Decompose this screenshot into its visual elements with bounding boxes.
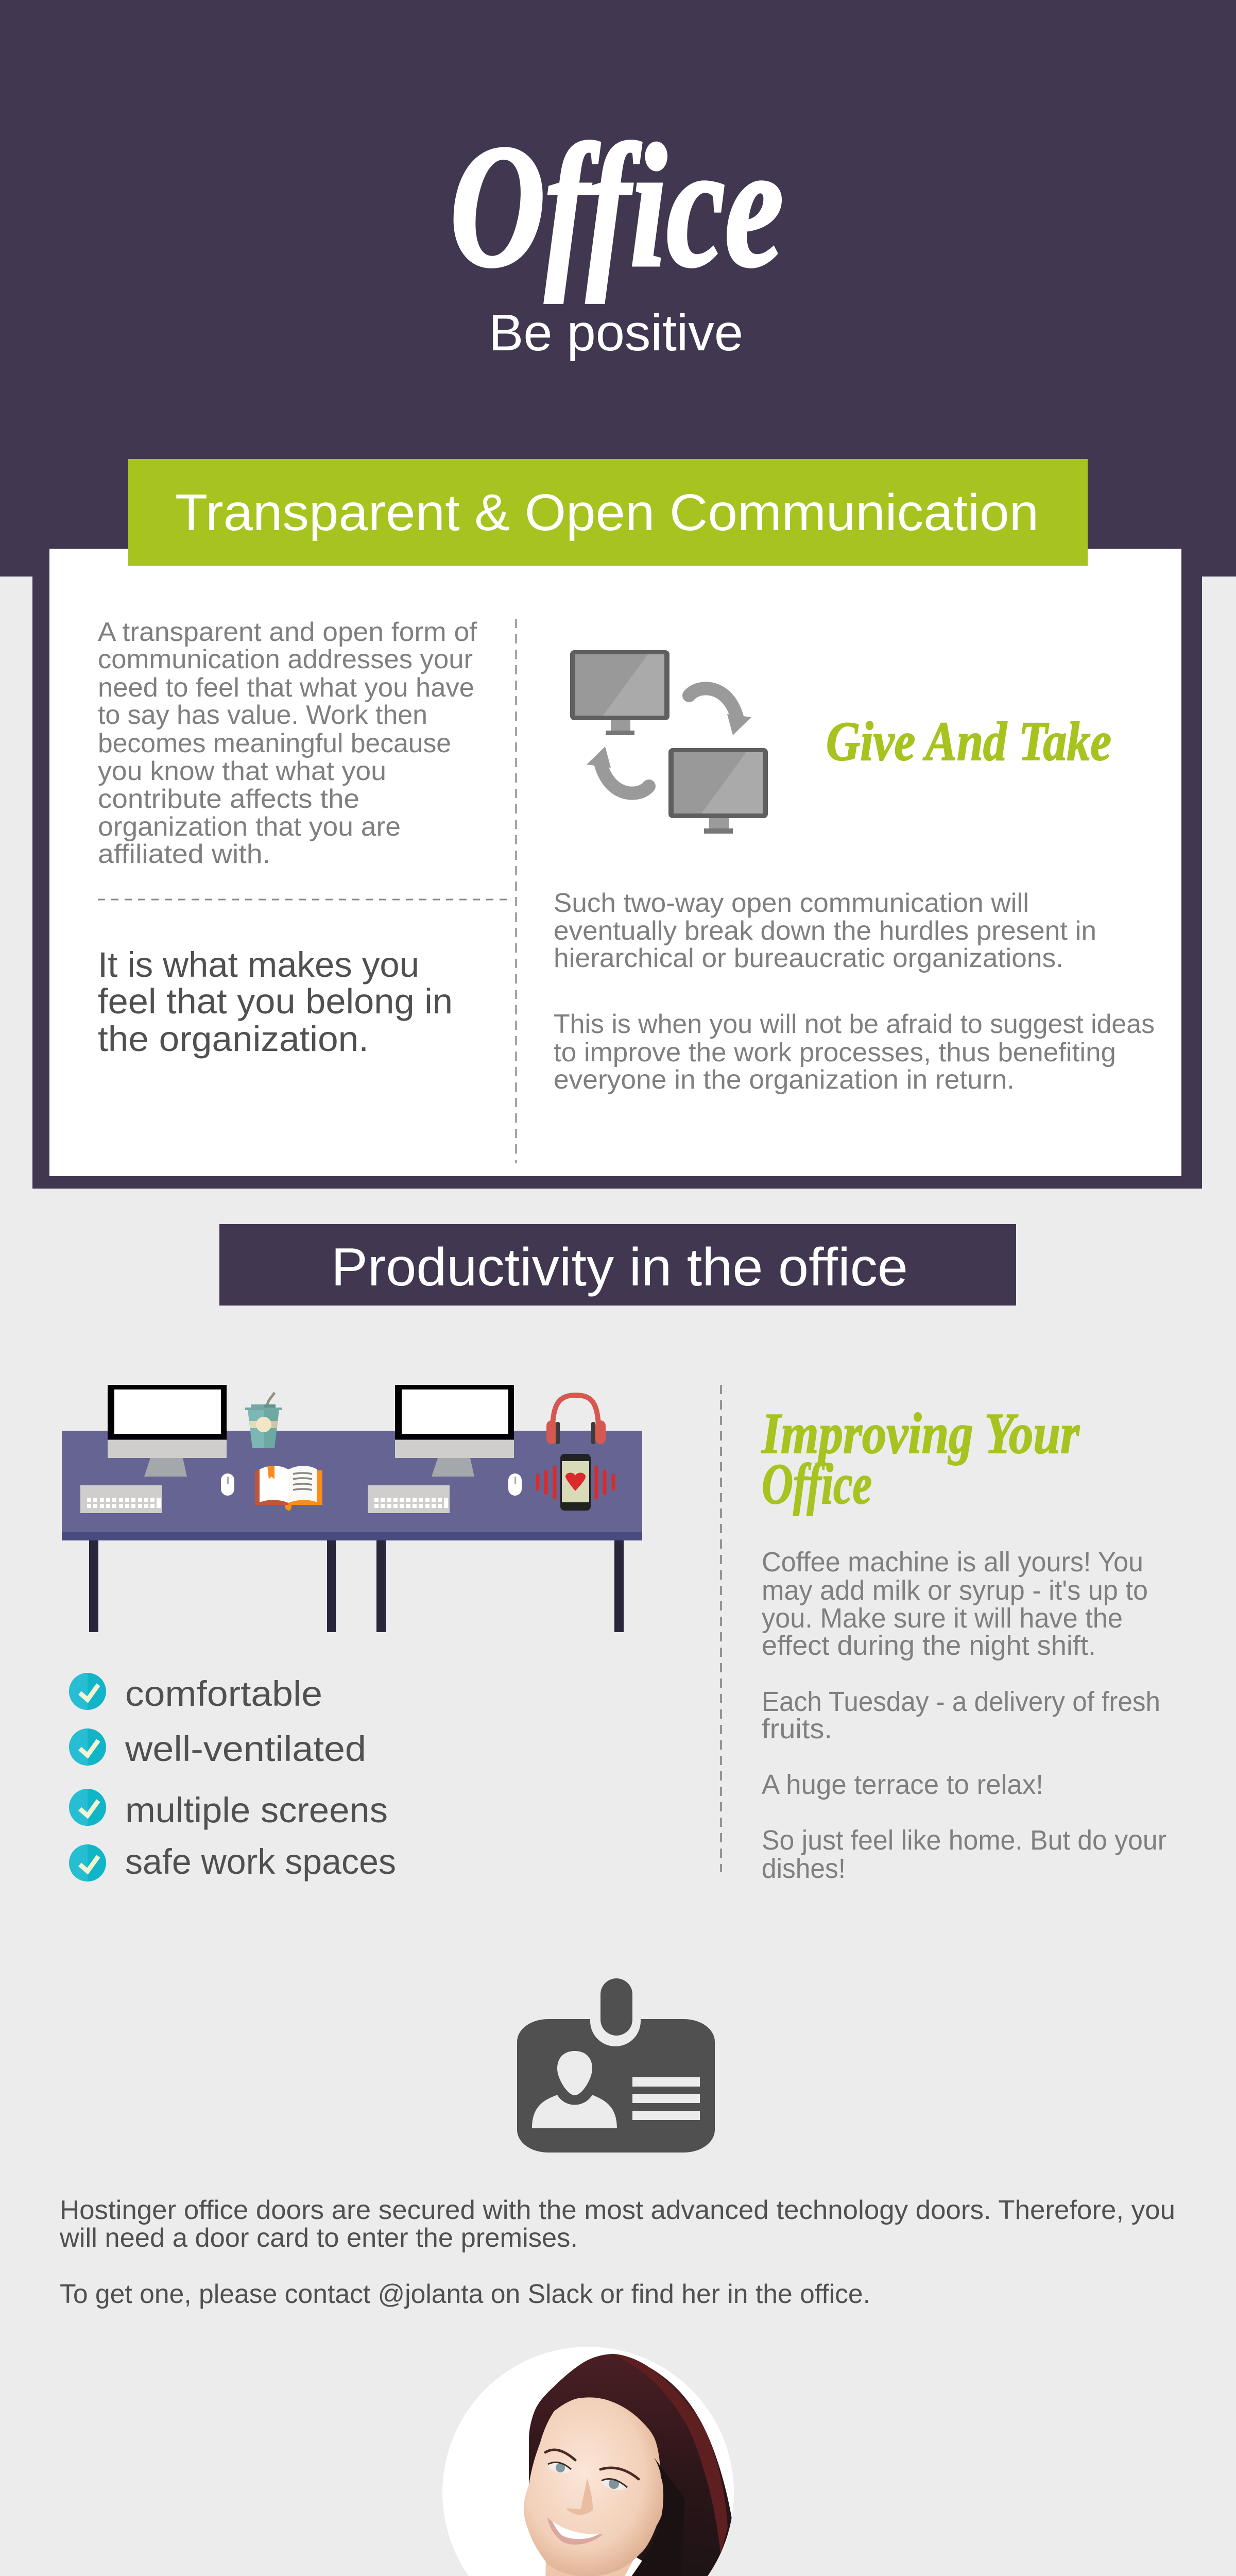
heading banner: productivity: Productivity in the office (331, 1238, 908, 1297)
monitor right (395, 1385, 514, 1477)
headphones (546, 1395, 606, 1444)
item: safe work spaces: safe work spaces (125, 1842, 396, 1882)
heading banner: productivity (219, 1224, 1016, 1306)
text block: door card: Hostinger office doors are secured with the most advanced technology doors. Therefore, you (60, 2195, 1175, 2225)
text block: intro: organization that you are (98, 812, 401, 842)
mouse right (508, 1473, 522, 1496)
item: comfortable: comfortable (125, 1674, 322, 1714)
text block: intro: A transparent and open form of (98, 617, 477, 647)
text block: two-way communication: Such two-way open communication will (554, 888, 1029, 918)
monitor one (570, 650, 670, 735)
text block: door card: will need a door card to enter the premises. (59, 2223, 578, 2253)
text block: office perks: A huge terrace to relax! (762, 1769, 1043, 1800)
text block: intro: you know that what you (98, 756, 386, 786)
illustration: office desk (62, 1385, 642, 1632)
monitor left (108, 1385, 227, 1477)
item: well-ventilated: well-ventilated (125, 1729, 366, 1769)
text block: intro (98, 617, 477, 869)
checklist (69, 1673, 396, 1882)
text block: door card: To get one, please contact @jolanta on Slack or find her in the office. (60, 2279, 870, 2309)
text block: belonging statement: It is what makes you (98, 945, 419, 985)
smile (547, 2517, 603, 2545)
text block: intro: becomes meaningful because (98, 728, 451, 758)
icon: door card badge (517, 1978, 715, 2153)
text block: two-way communication (554, 888, 1096, 973)
text block: intro: communication addresses your (98, 645, 473, 674)
text block: office perks: So just feel like home. But do your (762, 1825, 1166, 1856)
text block: suggesting ideas: everyone in the organization in return. (554, 1065, 1015, 1095)
arrow: top (689, 688, 751, 735)
text block: intro: to say has value. Work then (98, 700, 427, 730)
text block: office perks: effect during the night shift. (762, 1630, 1096, 1661)
text block: intro: contribute affects the (98, 784, 359, 814)
text block: office perks: may add milk or syrup - it's up to (762, 1575, 1148, 1606)
heading: improving your office: Improving Your (761, 1402, 1080, 1466)
subtitle: Be positive (489, 304, 743, 362)
neck shadow and earring hair (631, 2458, 685, 2576)
text block: two-way communication: hierarchical or bureaucratic organizations. (554, 943, 1063, 973)
phone with heart (538, 1454, 613, 1511)
heading: give and take: Give And Take (826, 711, 1111, 772)
text block: two-way communication: eventually break down the hurdles present in (554, 916, 1096, 946)
face (524, 2397, 666, 2576)
heading banner: communication (128, 459, 1088, 566)
text block: suggesting ideas: to improve the work processes, thus benefiting (554, 1038, 1116, 1067)
text block: belonging statement (98, 945, 453, 1059)
text block: intro: need to feel that what you have (98, 673, 474, 703)
text block: office perks: Each Tuesday - a delivery of fresh (762, 1686, 1160, 1717)
text block: office perks: fruits. (762, 1714, 832, 1744)
item: multiple screens: multiple screens (125, 1790, 388, 1830)
text block: belonging statement: feel that you belong in (98, 981, 453, 1021)
text block: office perks: Coffee machine is all yours! You (762, 1547, 1143, 1578)
panel: communication (32, 459, 1202, 1189)
mouse left (221, 1473, 234, 1496)
text block: intro: affiliated with. (98, 839, 270, 869)
arrow: bottom (587, 747, 649, 793)
header band (0, 0, 1236, 577)
text block: suggesting ideas: This is when you will not be afraid to suggest ideas (554, 1009, 1155, 1039)
portrait: Jolanta (442, 2347, 736, 2576)
text block: office perks: you. Make sure it will have the (762, 1603, 1123, 1634)
title: Office (450, 109, 783, 303)
hair (529, 2354, 736, 2576)
hair highlight rim (612, 2354, 728, 2555)
open book (255, 1466, 322, 1511)
text block: door card (59, 2195, 1175, 2309)
keyboard right (368, 1485, 450, 1513)
text block: suggesting ideas (554, 1009, 1155, 1095)
text block: office perks: dishes! (762, 1853, 846, 1884)
coffee cup (245, 1393, 282, 1448)
icon: two monitors exchanging (570, 650, 768, 834)
monitor two (668, 748, 768, 834)
heading banner: communication: Transparent & Open Communication (175, 484, 1039, 541)
eyes (549, 2463, 571, 2473)
nose (565, 2478, 593, 2515)
text block: office perks (762, 1547, 1166, 1884)
desk (62, 1431, 642, 1632)
text block: belonging statement: the organization. (98, 1019, 369, 1059)
keyboard left (80, 1485, 162, 1513)
heading: improving your office: Office (762, 1452, 872, 1516)
heading: improving your office (761, 1402, 1080, 1516)
brows (545, 2450, 639, 2479)
neck (545, 2560, 633, 2576)
